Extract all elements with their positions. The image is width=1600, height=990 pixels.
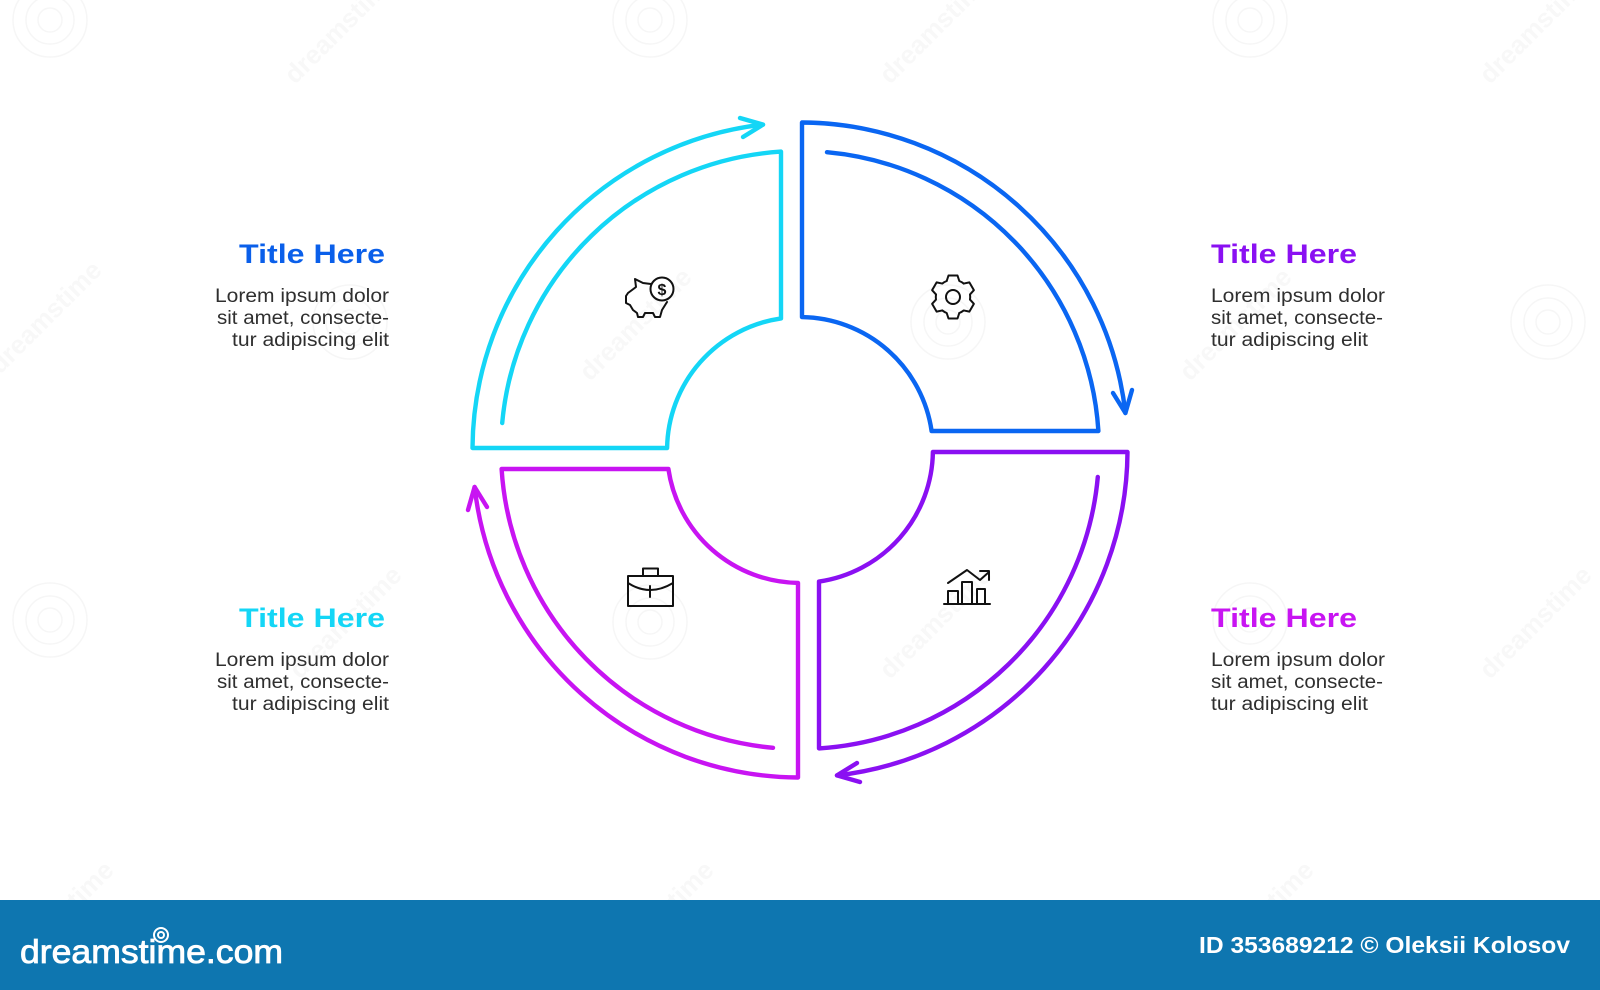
heading: top right: Title Here (1211, 239, 1357, 269)
segment: purple with arrow (819, 452, 1128, 782)
circular diagram (468, 118, 1132, 782)
icon: gear (929, 276, 977, 318)
body: bottom left: tur adipiscing elit (232, 694, 390, 715)
heading: bottom left: Title Here (239, 603, 385, 633)
text block: top right (1211, 239, 1386, 351)
text block: top left (215, 239, 390, 351)
body: bottom right: tur adipiscing elit (1211, 694, 1369, 715)
body: bottom right: sit amet, consecte- (1211, 672, 1383, 693)
body: top left (215, 286, 390, 351)
body: top left: Lorem ipsum dolor (215, 286, 390, 307)
body: top right: sit amet, consecte- (1211, 308, 1383, 329)
heading: bottom right: Title Here (1211, 603, 1357, 633)
icon: piggy bank (626, 278, 674, 317)
body: top left: sit amet, consecte- (217, 308, 389, 329)
text block: bottom right (1211, 603, 1386, 715)
body: bottom left (215, 650, 390, 715)
icon: briefcase (628, 568, 673, 606)
icon: bar chart with arrow (944, 570, 990, 604)
body: bottom right (1211, 650, 1386, 715)
body: bottom right: Lorem ipsum dolor (1211, 650, 1386, 671)
text: dreamstime (1473, 560, 1597, 684)
body: bottom left: sit amet, consecte- (217, 672, 389, 693)
footer credit: ID 353689212 © Oleksii Kolosov (1199, 932, 1570, 958)
text: dreamstime (1173, 262, 1297, 386)
segment: cyan with arrow (472, 118, 781, 448)
segment: magenta with arrow (468, 469, 798, 778)
body: top right: Lorem ipsum dolor (1211, 286, 1386, 307)
text block: bottom left (215, 603, 390, 715)
body: bottom left: Lorem ipsum dolor (215, 650, 390, 671)
icon: piggy bank: $ (658, 282, 667, 299)
heading: top left: Title Here (239, 239, 385, 269)
text: dreamstime (595, 855, 719, 979)
icon: logo spiral (154, 928, 168, 942)
text: dreamstime (573, 262, 697, 386)
text: dreamstime (873, 560, 997, 684)
segment: blue with arrow (802, 122, 1132, 431)
body: top right (1211, 286, 1386, 351)
text: dreamstime (1195, 855, 1319, 979)
text: dreamstime (283, 560, 407, 684)
footer logo text: dreamstime.com (20, 933, 283, 970)
body: top right: tur adipiscing elit (1211, 330, 1369, 351)
footer bar (0, 900, 1600, 990)
body: top left: tur adipiscing elit (232, 330, 390, 351)
